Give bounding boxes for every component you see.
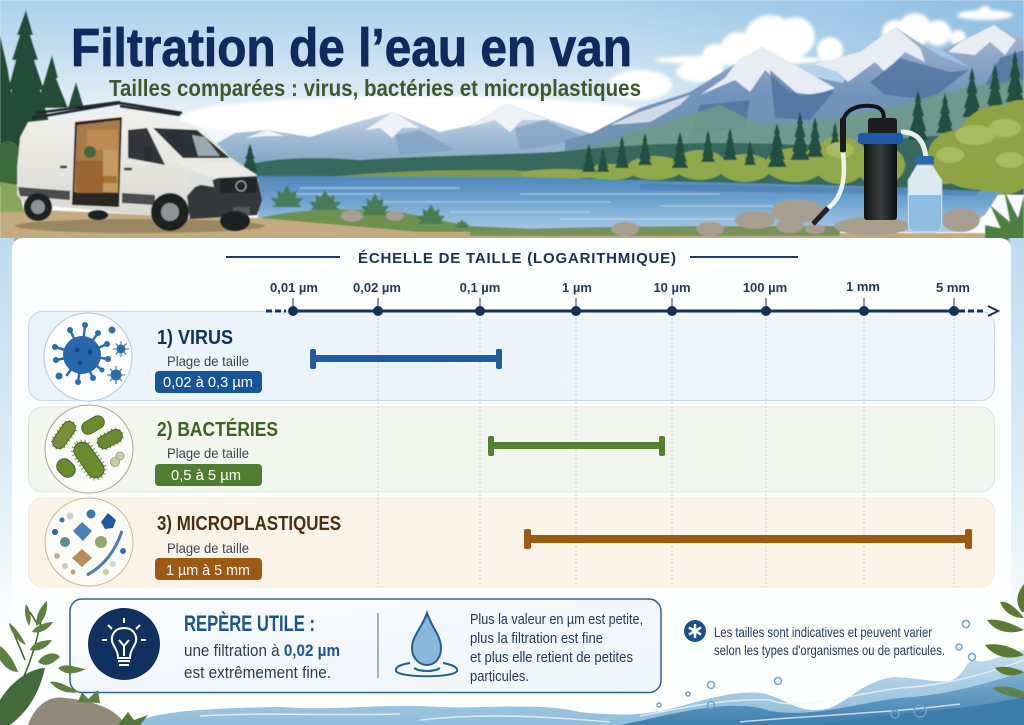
near mountains: [565, 25, 1024, 175]
heading: bacteria: 2) BACTÉRIES: [157, 418, 278, 441]
icon: asterisk: [684, 620, 706, 642]
size scale axis: 10 µm: [653, 280, 691, 295]
scale heading: ÉCHELLE DE TAILLE (LOGARITHMIQUE): [358, 250, 676, 267]
hood: [172, 160, 256, 178]
callout text: une filtration à 0,02 µm: [184, 641, 340, 660]
row: virus: [28, 312, 994, 401]
icon: water drop: [396, 613, 457, 676]
range bar: microplastics: [524, 529, 972, 549]
left forest: [0, 10, 84, 150]
green foothills: [555, 80, 1024, 190]
icon: microplastics: [45, 498, 133, 586]
guide lines: [378, 318, 954, 587]
size scale axis: 0,1 µm: [460, 280, 500, 295]
size scale axis: [266, 279, 998, 587]
size scale axis: 0,01 µm: [270, 280, 318, 295]
ground: [0, 208, 1024, 245]
mirror: [144, 146, 152, 161]
body: [17, 111, 262, 218]
size scale axis: 1 µm: [562, 280, 592, 295]
range bar: virus: [310, 349, 502, 369]
label: size range: Plage de taille: [167, 540, 249, 556]
ground shadow: [15, 219, 265, 233]
icon: bacteria: [45, 405, 133, 493]
heading: microplastics: 3) MICROPLASTIQUES: [157, 513, 341, 535]
row: microplastics: [28, 498, 994, 587]
front windows: [128, 128, 165, 165]
badge: virus range: [155, 371, 262, 393]
foreground shrubs: [270, 185, 470, 228]
shore pines: [242, 50, 1024, 172]
bottom left rocks: [28, 690, 148, 725]
water wave: [130, 620, 1024, 725]
icon: light bulb: [88, 608, 160, 680]
clouds: [180, 6, 1013, 140]
van illustration: [15, 102, 265, 233]
mid bushes: [520, 136, 905, 185]
size scale axis: 100 µm: [743, 280, 787, 295]
far mountains: [205, 103, 600, 168]
badge: microplastics range: [155, 558, 262, 580]
side door opening: [72, 117, 122, 207]
callout heading: REPÈRE UTILE :: [184, 611, 315, 636]
row: bacteria: [28, 405, 994, 493]
side background: [0, 238, 1024, 638]
note: Les tailles sont indicatives et peuvent varier: [714, 624, 932, 640]
white panel: [12, 238, 1011, 725]
water filter and bottle: [813, 106, 942, 232]
door handles: [60, 167, 132, 169]
right olive forest: [923, 100, 1024, 195]
callout explanation: Plus la valeur en µm est petite,: [470, 612, 643, 628]
far shoreline: [235, 130, 1024, 195]
rocks: [341, 199, 980, 236]
range bar: bacteria: [488, 436, 665, 456]
callout explanation: et plus elle retient de petites: [470, 650, 633, 666]
note: [684, 620, 945, 658]
left plant: [0, 601, 86, 725]
callout: useful benchmark: [70, 599, 661, 692]
callout: useful benchmark: est extrêmement fine.: [184, 663, 331, 682]
heading: virus: 1) VIRUS: [157, 327, 233, 349]
size scale axis: 0,02 µm: [353, 280, 401, 295]
size scale axis: 1 mm: [846, 279, 880, 294]
bottle: [915, 156, 934, 165]
size scale axis: 5 mm: [936, 280, 970, 295]
badge: virus range: 0,02 à 0,3 µm: [163, 374, 253, 391]
badge: bacteria range: [155, 464, 262, 486]
note: selon les types d'organismes ou de particules.: [714, 642, 945, 658]
badge: bacteria range: 0,5 à 5 µm: [171, 467, 241, 484]
subtitle: Tailles comparées : virus, bactéries et microplastiques: [109, 75, 641, 101]
label: size range: Plage de taille: [167, 445, 249, 461]
right plant: [985, 584, 1024, 698]
wheels: [24, 193, 250, 231]
body stripe: [18, 187, 155, 205]
background scene: [0, 0, 1024, 245]
lake: [258, 176, 1000, 232]
roof rack: [32, 102, 182, 118]
grille and bumper: [187, 176, 262, 219]
badge: microplastics range: 1 µm à 5 mm: [166, 562, 250, 579]
callout explanation: plus la filtration est fine: [470, 631, 603, 647]
callout explanation: [470, 612, 643, 685]
callout explanation: particules.: [470, 669, 529, 685]
icon: virus: [44, 313, 132, 401]
label: size range: Plage de taille: [167, 353, 249, 369]
title: Filtration de l’eau en van: [71, 18, 632, 78]
fern: [985, 190, 1024, 240]
